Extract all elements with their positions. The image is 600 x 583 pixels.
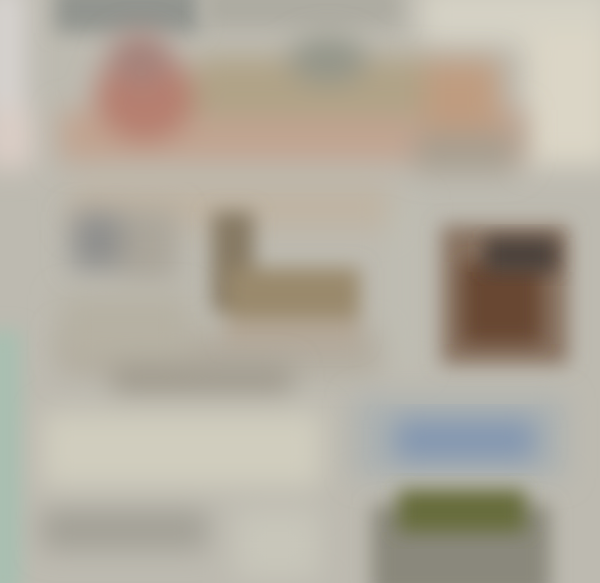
middle left grey image <box>72 210 177 280</box>
photo dark centre <box>462 262 542 344</box>
ground shadow <box>372 505 550 583</box>
header orange block <box>415 60 515 172</box>
lower right landscape panel <box>355 398 565 583</box>
right brown photo panel <box>442 226 568 364</box>
lower left text area <box>42 295 322 580</box>
page background tones <box>0 0 600 375</box>
sky <box>395 420 535 460</box>
grass <box>398 490 526 532</box>
landscape halo <box>355 398 565 478</box>
header red shape <box>95 32 195 143</box>
photo dark top corner <box>485 238 557 272</box>
middle chart panel in olive brown <box>212 212 360 344</box>
header panel <box>55 0 525 172</box>
left teal edge strip <box>0 330 21 583</box>
header grey-green shape <box>288 36 368 84</box>
photo frame <box>442 226 568 364</box>
